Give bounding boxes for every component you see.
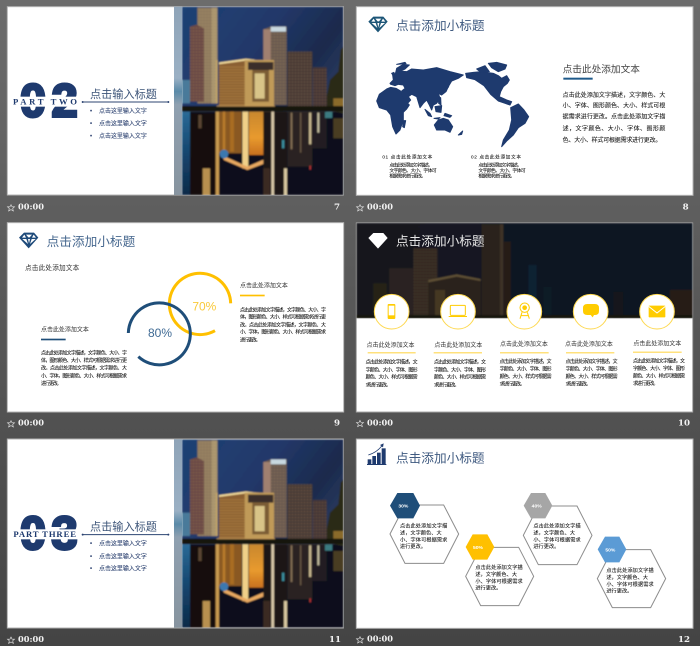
big number 02: 02 xyxy=(20,74,78,126)
map note 02: 02 点击此处添加文本 xyxy=(471,153,521,160)
blue ring 80% xyxy=(128,303,190,365)
icon: speech bubble xyxy=(573,294,608,329)
panel: slide 7 part two xyxy=(7,7,343,213)
left text block: 进行更改。 xyxy=(41,380,62,387)
footer: 12 xyxy=(678,635,690,645)
icon: envelope xyxy=(640,294,674,329)
left text block: 小、字体，图形颜色、大小、样式可根据需求 xyxy=(41,372,127,379)
bullet list: 点击这里输入文字 xyxy=(99,540,147,548)
right text block: 改。点击此处添加文字描述，文字颜色、大 xyxy=(240,321,326,328)
map note 01: 点击此处添加文字描述， xyxy=(389,162,433,169)
panel: slide 10 five columns xyxy=(356,223,693,429)
big number 03: 03 xyxy=(20,507,78,559)
map note 01: 文字颜色、大小、字体可 xyxy=(389,167,437,174)
column 1 text: 点击此处添加文本 xyxy=(367,341,415,349)
column 3 text: 点击此处添加文本 xyxy=(500,340,548,348)
bullet list: • xyxy=(90,554,92,560)
panel: slide 12 hexagons xyxy=(356,439,693,645)
city photo xyxy=(174,7,343,195)
left text block: 改。点击此处添加文字描述，文字颜色、大 xyxy=(41,365,127,372)
body text: 据需求进行更改。点击此处添加文字描 xyxy=(563,113,665,121)
bullet list: 点击这里输入文字 xyxy=(99,132,147,140)
footer: 10 xyxy=(678,419,690,429)
right text block xyxy=(240,281,326,343)
hexagon 50% yellow xyxy=(466,534,534,606)
bullet list: • xyxy=(90,122,92,128)
body text: 色、大小、样式可根据需求进行更改。 xyxy=(563,136,661,144)
icon: laptop xyxy=(441,294,475,329)
hexagon 50% yellow: 50% xyxy=(473,545,484,551)
icon: diamond xyxy=(368,17,388,32)
yellow ring 70% xyxy=(169,273,231,335)
footer xyxy=(356,635,690,645)
map note 01: 01 点击此处添加文本 xyxy=(382,153,433,160)
footer: 7 xyxy=(334,203,340,213)
panel: slide 8 world map xyxy=(356,7,693,213)
bullet list xyxy=(90,107,147,140)
footer xyxy=(356,203,689,213)
bullet list: • xyxy=(90,567,92,573)
bullet list: • xyxy=(90,109,92,115)
hexagon 30%: 30% xyxy=(398,504,409,510)
map note 02: 根据需求进行更改。 xyxy=(478,172,515,179)
icon: diamond xyxy=(19,233,38,248)
heading: 点击添加小标题 xyxy=(396,452,485,466)
map note 02: 文字颜色、大小、字体可 xyxy=(478,167,526,174)
title rule xyxy=(82,534,169,536)
bullet list: 点击这里输入文字 xyxy=(99,552,147,560)
panel: slide 9 circles xyxy=(7,223,344,429)
hexagon 30% xyxy=(390,493,459,563)
column 3 text xyxy=(500,340,552,388)
right heading: 点击此处添加文本 xyxy=(563,64,640,76)
left text block: 体，图形颜色、大小、样式可根据需求进行更 xyxy=(41,357,127,364)
body text: 小、字体、图形颜色、大小、样式可根 xyxy=(563,102,665,110)
part two band: PART TWO xyxy=(13,96,77,106)
column 1 text xyxy=(366,341,418,388)
heading: 点击添加小标题 xyxy=(396,19,485,33)
icon: phone xyxy=(374,294,409,329)
section title: 点击输入标题 xyxy=(90,520,157,534)
bullet list: • xyxy=(90,542,92,548)
map note 02: 点击此处添加文字描述， xyxy=(478,162,522,169)
footer xyxy=(7,419,340,429)
hexagon 40% gray: 40% xyxy=(532,504,542,510)
column 2 text xyxy=(434,341,486,388)
footer xyxy=(7,635,341,645)
footer: 9 xyxy=(334,419,340,429)
icon: diamond xyxy=(368,233,388,249)
section title: 点击输入标题 xyxy=(90,87,157,101)
right text block: 体，图形颜色、大小、样式可根据需求进行更 xyxy=(240,314,326,321)
body text: 述，文字颜色、大小、字体、图形颜 xyxy=(563,124,665,132)
footer: 11 xyxy=(329,635,341,645)
blue ring 80%: 80% xyxy=(148,326,172,340)
column 4 text xyxy=(565,340,618,388)
yellow ring 70%: 70% xyxy=(192,300,217,314)
bullet list: 点击这里输入文字 xyxy=(99,120,147,128)
right text block: 小、字体，图形颜色、大小、样式可根据需求 xyxy=(240,329,326,336)
intro text: 点击此处添加文本 xyxy=(25,263,80,272)
bullet list: • xyxy=(90,134,92,140)
bullet list: 点击这里输入文字 xyxy=(99,107,147,115)
left text block: 点击此处添加文字描述，文字颜色、大小、字 xyxy=(41,350,127,357)
right text block: 进行更改。 xyxy=(240,336,261,343)
title rule xyxy=(82,101,169,103)
icon: medal xyxy=(507,294,542,329)
right text block: 点击此处添加文本 xyxy=(240,281,288,289)
map note 01 xyxy=(382,153,437,179)
hexagon 40% gray xyxy=(523,493,592,565)
heading: 点击添加小标题 xyxy=(396,235,485,249)
part three band: PART THREE xyxy=(13,529,76,539)
panel: slide 11 part three xyxy=(7,439,343,645)
header photo xyxy=(356,223,693,318)
bullet list: 点击这里输入文字 xyxy=(99,565,147,573)
footer: 8 xyxy=(683,203,689,213)
heading: 点击添加小标题 xyxy=(47,235,136,249)
footer xyxy=(356,418,690,429)
column 5 text: 点击此处添加文本 xyxy=(633,339,681,347)
icon: bar chart xyxy=(367,443,386,465)
bullet list xyxy=(90,540,147,573)
left text block xyxy=(41,325,127,387)
right text block: 点击此处添加文字描述，文字颜色、大小、字 xyxy=(240,306,326,313)
footer xyxy=(7,203,340,213)
city photo xyxy=(174,439,343,628)
column 2 text: 点击此处添加文本 xyxy=(434,341,482,349)
column 5 text xyxy=(633,339,685,387)
heading rule xyxy=(563,78,593,80)
map note 02 xyxy=(471,153,526,179)
left text block: 点击此处添加文本 xyxy=(41,325,89,333)
hexagon 50% blue xyxy=(597,537,666,608)
body text: 点击此处添加文字描述，文字颜色、大 xyxy=(563,91,665,99)
body text xyxy=(563,91,665,144)
world map xyxy=(377,62,529,147)
hexagon 50% blue: 50% xyxy=(605,547,616,553)
map note 01: 根据需求进行更改。 xyxy=(389,172,426,179)
column 4 text: 点击此处添加文本 xyxy=(565,340,613,348)
